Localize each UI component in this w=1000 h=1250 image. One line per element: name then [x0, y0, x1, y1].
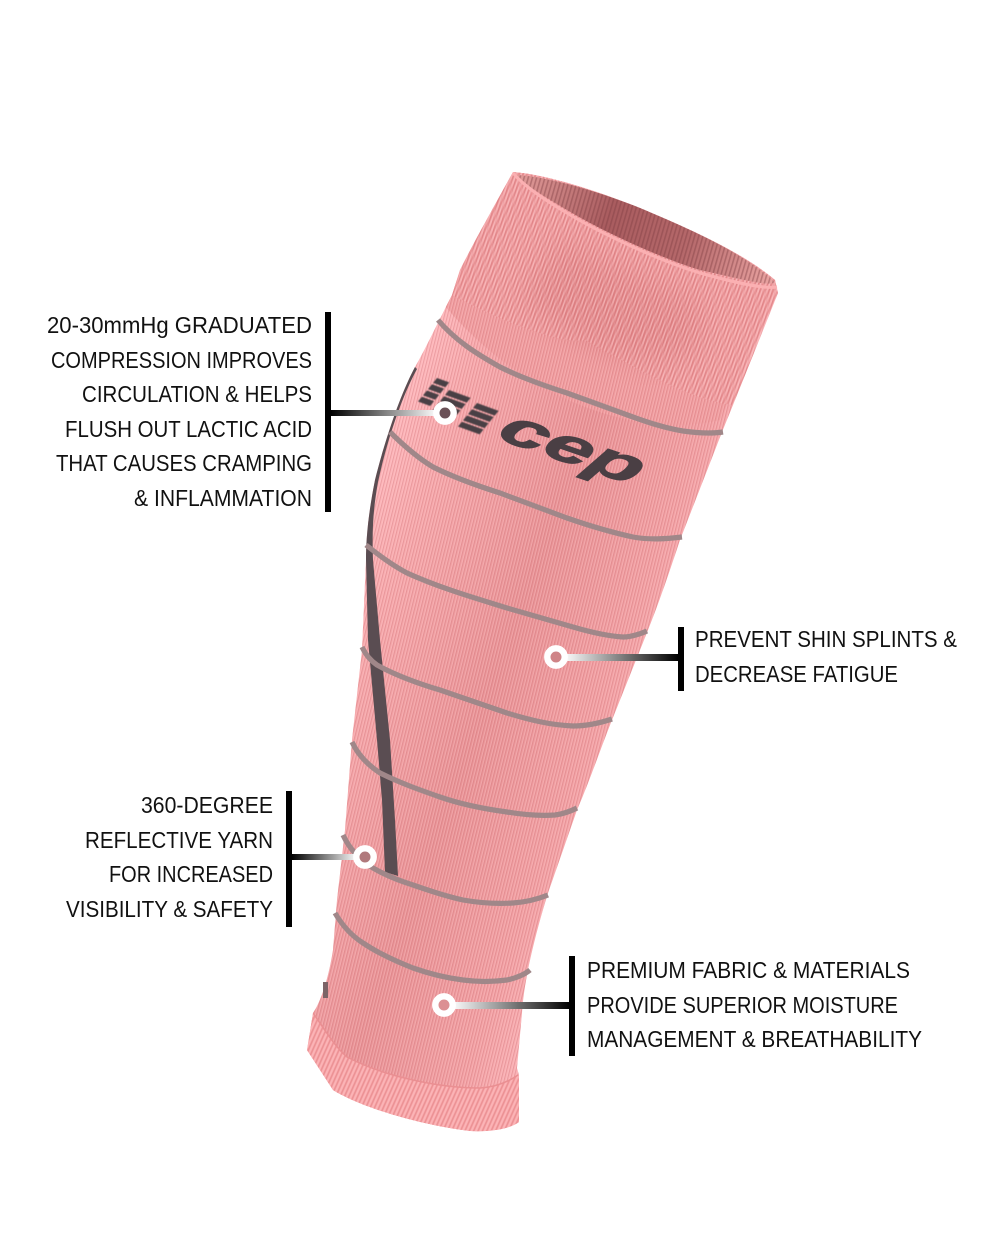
callout text: shin splints: DECREASE FATIGUE	[695, 661, 898, 687]
reflective stripes	[335, 320, 723, 982]
callout text: reflective yarn: 360-DEGREE	[141, 792, 273, 818]
marker	[356, 848, 374, 866]
callout text: compression: COMPRESSION IMPROVES	[51, 347, 312, 373]
bracket bar	[678, 627, 684, 691]
callout: compression	[47, 312, 454, 512]
connector line	[292, 854, 358, 860]
dark reflective seam	[366, 367, 417, 876]
callout text: premium fabric: PREMIUM FABRIC & MATERIALS	[587, 957, 910, 983]
sleeve inner opening	[513, 173, 777, 287]
callout text: compression: 20-30mmHg GRADUATED	[47, 312, 312, 338]
bracket bar	[569, 956, 575, 1056]
callout text: reflective yarn: FOR INCREASED	[109, 861, 273, 887]
compression sleeve	[290, 160, 790, 1140]
callout: shin splints	[547, 626, 957, 691]
callout text: compression: THAT CAUSES CRAMPING	[56, 450, 312, 476]
callout text: compression: & INFLAMMATION	[134, 485, 312, 511]
connector line	[331, 410, 438, 416]
bracket bar	[325, 312, 331, 512]
logo wordmark: cep	[489, 399, 658, 495]
marker	[547, 648, 565, 666]
connector line	[451, 1002, 570, 1009]
infographic canvas	[48, 172, 957, 1132]
callout text: compression: CIRCULATION & HELPS	[82, 381, 312, 407]
callout text: shin splints: PREVENT SHIN SPLINTS &	[695, 626, 957, 652]
callout text: reflective yarn: REFLECTIVE YARN	[85, 827, 273, 853]
callout text: reflective yarn	[66, 792, 273, 922]
bracket bar	[286, 791, 292, 927]
marker	[436, 404, 454, 422]
small dark mark on side	[323, 982, 328, 998]
callout text: shin splints	[695, 626, 957, 687]
marker	[435, 996, 453, 1014]
callout text: reflective yarn: VISIBILITY & SAFETY	[66, 896, 273, 922]
callout text: compression: FLUSH OUT LACTIC ACID	[65, 416, 312, 442]
sleeve body	[290, 160, 790, 1140]
connector line	[563, 654, 678, 661]
logo stripes icon	[418, 378, 499, 434]
callout text: premium fabric	[587, 957, 922, 1052]
callout text: premium fabric: PROVIDE SUPERIOR MOISTURE	[587, 992, 898, 1018]
callout: premium fabric	[435, 956, 922, 1056]
callout text: premium fabric: MANAGEMENT & BREATHABILITY	[587, 1026, 922, 1052]
callout: reflective yarn	[66, 791, 374, 927]
cep logo	[418, 378, 658, 495]
callout text: compression	[47, 312, 312, 511]
